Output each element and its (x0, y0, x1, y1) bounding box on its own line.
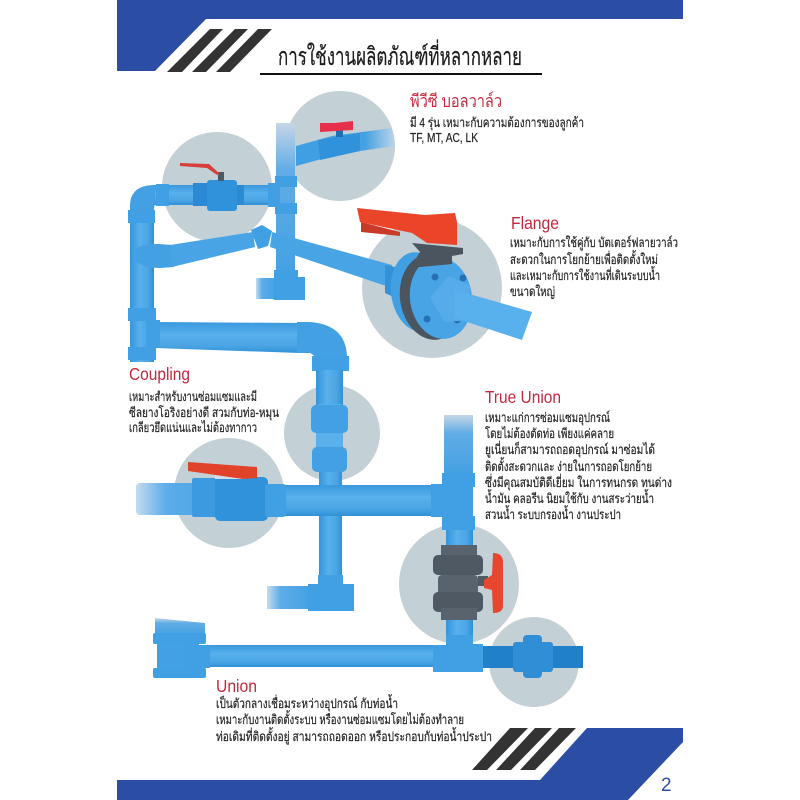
vertical riser with tee (256, 123, 305, 300)
text: Union: เหมาะกับงานติดตั้งระบบ หรืองานซ่อมแซมโดยไม่ต้องทำลาย (216, 710, 464, 727)
pipe assembly: upper section (128, 121, 394, 371)
text: Union: ท่อเดิมที่ติดตั้งอยู่ สามารถถอดออก หรือประกอบกับท่อน้ำประปา (216, 727, 492, 745)
text: Coupling: Coupling (129, 364, 190, 384)
long horizontal pipe (136, 483, 236, 515)
text: True Union: โดยไม่ต้องตัดท่อ เพียงแค่คลาย (485, 426, 614, 441)
lower horizontal pipe with elbow (146, 320, 349, 371)
top horizontal pipe with elbow (130, 163, 280, 212)
text: True Union: เหมาะแก่การซ่อมแซมอุปกรณ์ (485, 410, 610, 426)
flange butterfly valve (357, 208, 532, 344)
red lever handle (357, 208, 463, 268)
text: PVC ball valve: มี 4 รุ่น เหมาะกับความต้องการของลูกค้า (410, 115, 584, 131)
bottom blue banner (117, 728, 683, 800)
text: Union (216, 676, 492, 745)
bottom left tee (153, 618, 210, 678)
bottom horizontal pipe (205, 635, 583, 672)
top blue banner (117, 0, 683, 71)
flange body (385, 249, 477, 344)
grey true union valve (433, 545, 503, 620)
text: Union: Union (216, 676, 257, 696)
text: Coupling: เกลียวยึดแน่นและไม่ต้องทากาว (129, 420, 257, 435)
text: True Union: ซึ่งมีคุณสมบัติดีเยี่ยม ในการทนกรด ทนด่าง (485, 474, 672, 491)
text: Flange: ขนาดใหญ่ (510, 284, 555, 299)
text: PVC ball valve: TF, MT, AC, LK (410, 130, 478, 145)
grey highlight circles (162, 91, 579, 707)
page number: 2 (661, 775, 672, 796)
blue ball valve with red handle (188, 462, 286, 521)
text: PVC ball valve: พีวีซี บอลวาล์ว (410, 91, 502, 111)
text: Flange: สะดวกในการโยกย้ายเพื่อติดตั้งใหม่ (510, 250, 658, 267)
angled pipes (132, 225, 392, 288)
flange outlet pipe (455, 290, 532, 340)
text: PVC ball valve (410, 91, 584, 145)
text: True Union: True Union (485, 387, 561, 407)
lower tee (267, 575, 354, 611)
bottom diagonal stripes (472, 728, 576, 770)
text: Flange: Flange (511, 213, 559, 233)
text: Coupling: เหมาะสำหรับงานซ่อมแซมและมี (129, 389, 257, 404)
text: True Union: น้ำมัน คลอรีน นิยมใช้กับ งานสระว่ายน้ำ (485, 489, 654, 506)
text: True Union: ยูเนี่ยนก็สามารถถอดอุปกรณ์ มาซ่อมได้ (485, 440, 655, 458)
title: การใช้งานผลิตภัณฑ์ที่หลากหลาย (278, 39, 522, 71)
text: Coupling (129, 364, 279, 435)
top diagonal stripes (167, 29, 272, 72)
left vertical pipe (128, 210, 156, 362)
text: Coupling: ซีลยางโอริงอย่างดี สวมกับท่อ-หมุน (129, 405, 279, 421)
text: Flange (510, 213, 678, 299)
right riser with tee (431, 415, 475, 638)
text: Union: เป็นตัวกลางเชื่อมระหว่างอุปกรณ์ กับท่อน้ำ (216, 694, 398, 712)
pipe assembly: lower section (136, 370, 583, 678)
central vertical pipe with union (311, 370, 348, 577)
text: True Union (485, 387, 672, 522)
ball valve pipe, red-handled valve at top right (296, 121, 394, 166)
text: Flange: และเหมาะกับการใช้งานที่เดินระบบน้ำ (510, 266, 660, 283)
text: True Union: ติดตั้งสะดวกและ ง่ายในการถอดโยกย้าย (485, 457, 652, 474)
blue union fitting (513, 635, 553, 678)
text: Flange: เหมาะกับการใช้คู่กับ บัตเตอร์ฟลายวาล์ว (510, 235, 678, 251)
text: True Union: สวนน้ำ ระบบกรองน้ำ งานประปา (485, 505, 621, 522)
